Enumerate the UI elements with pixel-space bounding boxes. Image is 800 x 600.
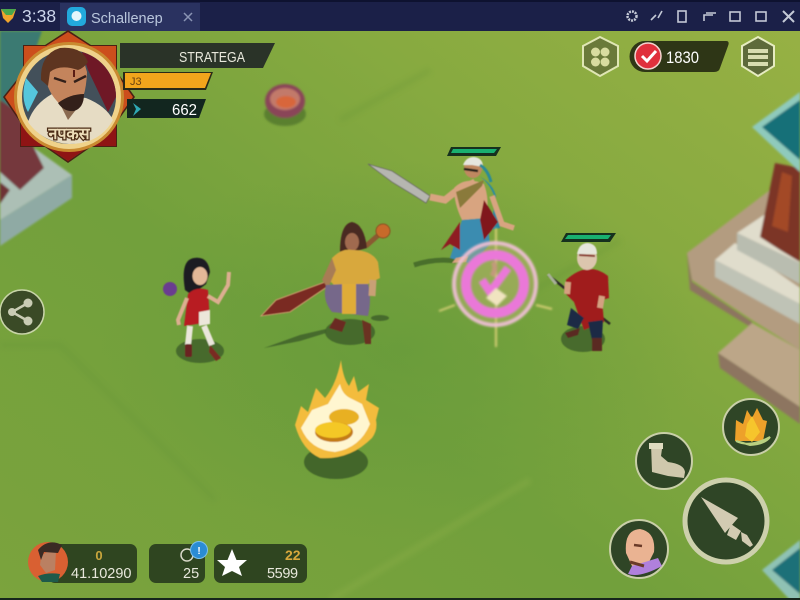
avatar [28, 542, 68, 582]
hero: monk in red [548, 243, 610, 352]
icon: app [67, 7, 86, 26]
share button [0, 290, 44, 334]
player name banner [120, 43, 275, 68]
title bar [0, 0, 800, 31]
fire with gold coins [295, 360, 379, 479]
score bar: 662 [172, 102, 197, 119]
button: boot [636, 433, 692, 489]
portrait caption: नपकस [47, 126, 91, 143]
garment [28, 94, 113, 144]
currency pill: 1830 [666, 49, 699, 67]
hero: woman in red [163, 258, 229, 363]
tab [60, 3, 200, 31]
object: clay pot [264, 84, 306, 126]
face [44, 62, 87, 110]
stat panel: timer: 25 [183, 566, 199, 582]
magic target ring [439, 228, 552, 347]
currency pill [630, 41, 729, 72]
stat panel: timer [149, 542, 208, 583]
window controls [628, 11, 794, 22]
building: right temple [687, 92, 800, 424]
icon: shield logo [1, 9, 16, 23]
level bar: J3 [130, 76, 142, 88]
stat panel: stars: 5599 [267, 566, 298, 582]
player portrait [3, 30, 135, 163]
stat panel: player: 0 [95, 548, 103, 563]
button: attack [685, 480, 767, 562]
building: left corner [0, 31, 72, 246]
building: bottom right corner [762, 540, 800, 600]
stat panel: player [28, 542, 137, 583]
level bar [123, 72, 213, 90]
player name banner: STRATEGA [179, 49, 245, 66]
score bar [127, 99, 206, 119]
hexagon menu button [742, 37, 774, 76]
health bar: swordsman [447, 147, 501, 156]
clock: 3:38 [22, 6, 56, 26]
hero: swordsman [368, 157, 514, 265]
stat panel: stars: 22 [285, 547, 301, 563]
stat panel: player: 41.10290 [71, 566, 131, 582]
health bar: monk [561, 233, 616, 242]
hexagon grid button [583, 37, 618, 76]
stat panel: timer: ! [197, 546, 201, 557]
app name: Schallenep [91, 11, 163, 27]
beard [58, 94, 84, 111]
close tab [184, 13, 192, 21]
hair [41, 48, 88, 86]
hero: warrior with sword [261, 222, 390, 348]
button: crystal [723, 399, 779, 455]
stat panel: stars [214, 544, 307, 583]
bottom edge [0, 598, 800, 600]
button: bald character [610, 520, 668, 578]
